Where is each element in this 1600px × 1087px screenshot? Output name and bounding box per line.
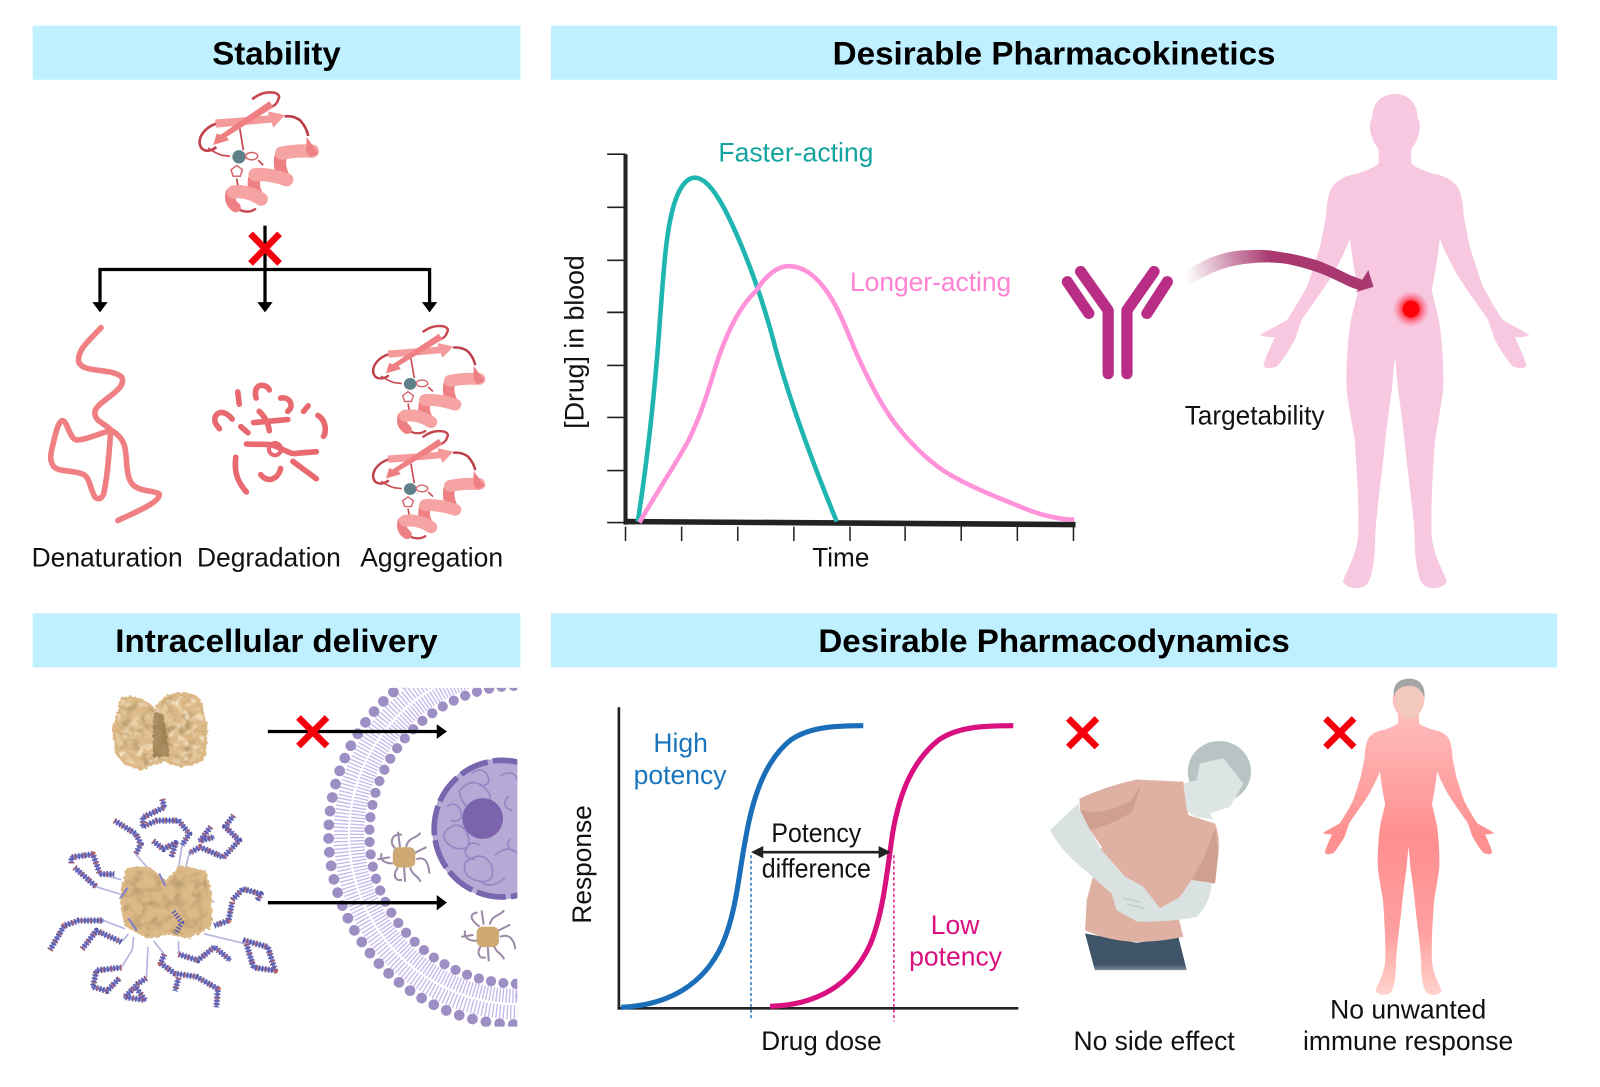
panel: Stability [32, 26, 520, 572]
label: Denaturation: Denaturation [32, 542, 183, 572]
icon: human body silhouette [1260, 94, 1530, 588]
axis label: drug in blood: [Drug] in blood [560, 255, 590, 429]
label: low potency: Low [931, 910, 980, 940]
heading: Intracellular delivery [33, 613, 520, 667]
label: Degradation: Degradation [197, 542, 341, 572]
icon: red cross [298, 717, 327, 746]
icon: bare protein [113, 693, 207, 770]
label: potency difference [762, 818, 871, 884]
icon: antibody [1067, 272, 1167, 374]
panel: Desirable Pharmacodynamics [551, 613, 1557, 1056]
label: high potency: High [653, 728, 708, 758]
label: no unwanted immune response: immune response [1303, 1026, 1513, 1056]
small conjugate in cytoplasm [378, 832, 430, 882]
label: potency difference: Potency [771, 818, 862, 848]
icon: man with stomach pain [1050, 741, 1251, 970]
strands [50, 799, 275, 1007]
label: low potency [909, 910, 1003, 971]
arrow: blocked entry [268, 724, 447, 739]
icon: red cross [251, 234, 280, 263]
heading: Desirable Pharmacokinetics [551, 26, 1557, 80]
icon: red cross immune [1326, 718, 1354, 747]
arrow: targeting [1186, 250, 1373, 292]
label: no unwanted immune response: No unwanted [1330, 994, 1486, 1024]
axis label: time: Time [812, 542, 869, 572]
icon: aggregated proteins [373, 326, 485, 538]
label: Faster-acting: Faster-acting [718, 137, 873, 167]
label: Targetability: Targetability [1185, 401, 1325, 431]
curve: low potency [770, 726, 1013, 1006]
panel: Intracellular delivery [32, 613, 520, 1027]
heading: Desirable Pharmacokinetics: Desirable Pharmacokinetics [833, 34, 1276, 71]
chart: dose response [567, 707, 1018, 1056]
label: no unwanted immune response [1303, 994, 1513, 1056]
axis label: drug dose: Drug dose [761, 1026, 882, 1056]
label: Aggregation: Aggregation [360, 542, 503, 572]
icon: red cross side effect [1068, 718, 1097, 747]
heading: Stability [33, 26, 520, 80]
heading: Stability: Stability [212, 34, 341, 71]
curve: high potency [621, 726, 863, 1007]
chart: concentration over time [560, 137, 1076, 572]
arrow: potency difference [751, 846, 891, 858]
branching arrows [92, 226, 437, 312]
curve: longer-acting [639, 266, 1074, 523]
label: low potency: potency [909, 941, 1003, 971]
label: Longer-acting: Longer-acting [850, 267, 1011, 297]
nucleus [431, 758, 518, 900]
heading: Desirable Pharmacodynamics: Desirable Pharmacodynamics [818, 622, 1290, 659]
icon: degraded fragments [215, 385, 325, 492]
icon: folded protein [200, 92, 318, 212]
heading: Intracellular delivery: Intracellular delivery [115, 622, 438, 659]
heading: Desirable Pharmacodynamics [551, 613, 1557, 667]
label: potency difference: difference [762, 854, 871, 884]
axis label: response: Response [567, 805, 597, 924]
small conjugate near nucleus [461, 910, 515, 961]
label: high potency [634, 728, 727, 790]
arrow: successful entry [268, 895, 447, 910]
panel: Desirable Pharmacokinetics [551, 26, 1557, 588]
label: No side effect: No side effect [1073, 1026, 1235, 1056]
curve: faster-acting [638, 178, 837, 522]
icon: target site [1393, 291, 1429, 327]
icon: inflamed body [1323, 679, 1494, 995]
icon: denatured chain [51, 328, 159, 521]
diagram: cell with membrane and nucleus [323, 688, 518, 1027]
label: high potency: potency [634, 760, 727, 790]
icon: protein conjugate [50, 799, 275, 1007]
